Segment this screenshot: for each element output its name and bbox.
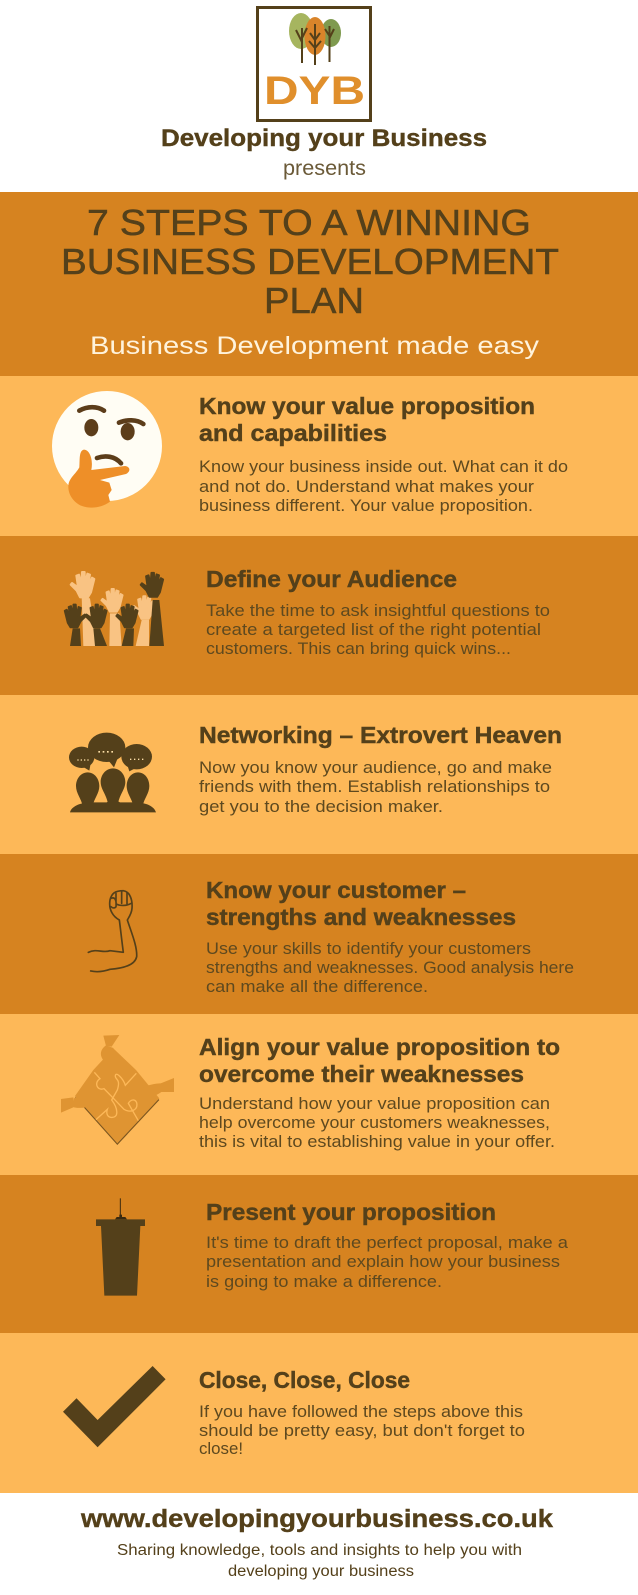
main title: BUSINESS DEVELOPMENT bbox=[61, 241, 559, 282]
icon: raised hands bbox=[65, 572, 164, 646]
step 2 text bbox=[206, 602, 550, 658]
step 5 heading bbox=[199, 1034, 560, 1087]
panel: step 2 audience bbox=[0, 536, 638, 695]
step 5 text: help overcome your customers weaknesses, bbox=[199, 1114, 550, 1132]
panel: step 1 value proposition bbox=[0, 376, 638, 536]
step 5 text bbox=[199, 1095, 555, 1151]
step 3 text: get you to the decision maker. bbox=[199, 798, 443, 816]
step 5 text: this is vital to establishing value in your offer. bbox=[199, 1133, 555, 1151]
step 1 heading: and capabilities bbox=[199, 420, 387, 446]
icon: thinking face bbox=[52, 391, 162, 508]
step 4 text bbox=[206, 940, 574, 996]
icon: people talking bbox=[69, 733, 156, 812]
step 4 heading: Know your customer – bbox=[206, 877, 466, 903]
footer tagline: Sharing knowledge, tools and insights to help you with bbox=[117, 1542, 522, 1559]
panel: step 3 networking bbox=[0, 695, 638, 854]
step 5 heading: overcome their weaknesses bbox=[199, 1061, 524, 1087]
step 6 text: presentation and explain how your business bbox=[206, 1253, 560, 1271]
step 2 heading: Define your Audience bbox=[206, 566, 457, 592]
website url: www.developingyourbusiness.co.uk bbox=[80, 1505, 553, 1533]
step 3 text: Now you know your audience, go and make bbox=[199, 759, 552, 777]
step 6 heading: Present your proposition bbox=[206, 1199, 496, 1225]
step 4 text: can make all the difference. bbox=[206, 978, 428, 996]
panel: step 7 close bbox=[0, 1333, 638, 1493]
step 1 text: and not do. Understand what makes your bbox=[199, 478, 535, 496]
step 5 text: Understand how your value proposition can bbox=[199, 1095, 550, 1113]
icon: check mark bbox=[63, 1366, 166, 1447]
footer tagline bbox=[117, 1542, 522, 1580]
panel: step 5 align bbox=[0, 1014, 638, 1175]
subtitle: Business Development made easy bbox=[90, 332, 540, 360]
logo bbox=[258, 8, 370, 120]
step 1 heading bbox=[199, 393, 535, 446]
step 7 heading: Close, Close, Close bbox=[199, 1367, 410, 1393]
step 7 text: If you have followed the steps above this bbox=[199, 1403, 523, 1421]
icon: flexed arm bbox=[88, 891, 137, 972]
icon: puzzle pieces and hands bbox=[61, 1035, 174, 1145]
step 4 heading: strengths and weaknesses bbox=[206, 904, 516, 930]
step 4 text: strengths and weaknesses. Good analysis here bbox=[206, 959, 574, 977]
step 6 text: is going to make a difference. bbox=[206, 1273, 442, 1291]
brand name: Developing your Business bbox=[161, 125, 487, 152]
main title: 7 STEPS TO A WINNING bbox=[87, 202, 531, 243]
step 2 text: Take the time to ask insightful questions to bbox=[206, 602, 550, 620]
step 3 heading: Networking – Extrovert Heaven bbox=[199, 722, 562, 748]
step 6 text bbox=[206, 1234, 569, 1291]
logo: DYB bbox=[264, 69, 365, 113]
step 6 text: It's time to draft the perfect proposal, make a bbox=[206, 1234, 569, 1252]
icon: podium bbox=[96, 1198, 145, 1296]
panel: step 4 strengths bbox=[0, 854, 638, 1014]
step 5 heading: Align your value proposition to bbox=[199, 1034, 560, 1060]
panel: step 6 present bbox=[0, 1175, 638, 1333]
step 1 text: business different. Your value proposition. bbox=[199, 497, 533, 515]
step 1 text bbox=[199, 458, 568, 515]
presents: presents bbox=[283, 156, 366, 180]
step 4 heading bbox=[206, 877, 516, 930]
step 1 text: Know your business inside out. What can it do bbox=[199, 458, 568, 476]
title panel bbox=[0, 192, 638, 376]
main title: PLAN bbox=[264, 280, 364, 321]
step 7 text: should be pretty easy, but don't forget to bbox=[199, 1422, 525, 1440]
step 7 text: close! bbox=[199, 1440, 243, 1458]
step 3 text: friends with them. Establish relationships to bbox=[199, 778, 550, 796]
step 4 text: Use your skills to identify your customers bbox=[206, 940, 531, 958]
step 2 text: customers. This can bring quick wins... bbox=[206, 640, 511, 658]
step 3 text bbox=[199, 759, 552, 816]
step 1 heading: Know your value proposition bbox=[199, 393, 535, 419]
main title bbox=[61, 202, 559, 321]
step 2 text: create a targeted list of the right potential bbox=[206, 621, 541, 639]
step 7 text bbox=[199, 1403, 525, 1458]
footer tagline: developing your business bbox=[228, 1563, 414, 1580]
